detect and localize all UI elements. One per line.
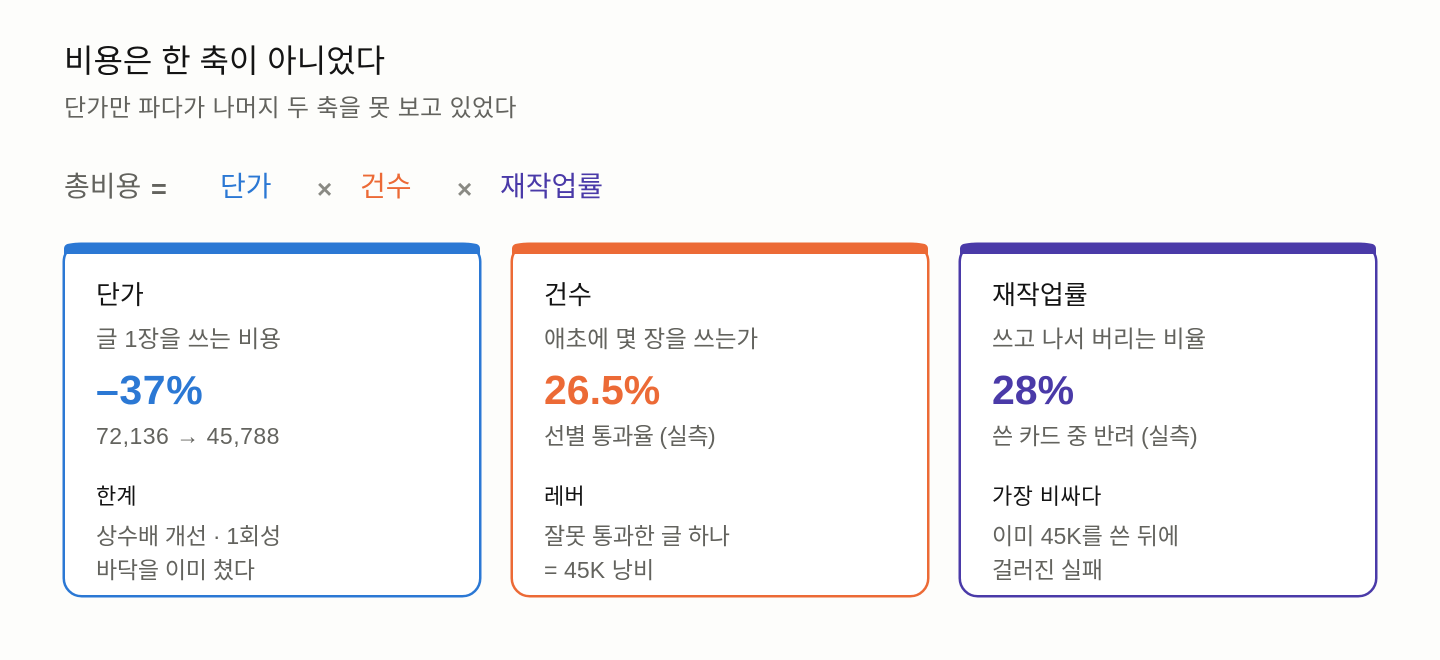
note text line 2: = 45K 낭비	[544, 557, 654, 583]
note text line 2: 바닥을 이미 쳤다	[96, 557, 255, 583]
card description: 글 1장을 쓰는 비용	[96, 326, 281, 352]
panel: count	[510, 242, 930, 598]
formula: times 2: ×	[457, 174, 472, 204]
note label: 레버	[544, 484, 585, 509]
formula: rework rate: 재작업률	[500, 171, 603, 202]
panel: rework rate	[958, 242, 1378, 598]
card heading: 재작업률	[992, 280, 1088, 310]
number detail: 72,136 → 45,788	[96, 423, 280, 449]
note text: 상수배 개선 · 1회성	[96, 523, 281, 549]
panel: unit price	[62, 242, 482, 598]
note label: 한계	[96, 484, 137, 509]
note label: 가장 비싸다	[992, 484, 1102, 509]
note text: 잘못 통과한 글 하나	[544, 523, 730, 549]
card description: 쓰고 나서 버리는 비율	[992, 326, 1206, 352]
formula: equals: =	[151, 174, 167, 204]
note text line 2: 걸러진 실패	[992, 557, 1103, 583]
title: 비용은 한 축이 아니었다	[64, 43, 385, 79]
subtitle: 단가만 파다가 나머지 두 축을 못 보고 있었다	[64, 95, 517, 122]
key number: –37%	[96, 367, 203, 413]
card description: 애초에 몇 장을 쓰는가	[544, 326, 758, 352]
key number: 26.5%	[544, 367, 660, 413]
number detail: 선별 통과율 (실측)	[544, 423, 715, 449]
card heading: 건수	[544, 280, 592, 310]
formula: times 1: ×	[317, 174, 332, 204]
formula	[64, 171, 603, 204]
formula: unit price: 단가	[220, 171, 272, 202]
card heading: 단가	[96, 280, 144, 310]
formula: count: 건수	[360, 171, 412, 202]
note text: 이미 45K를 쓴 뒤에	[992, 523, 1179, 549]
formula: total cost: 총비용	[64, 171, 141, 202]
number detail: 쓴 카드 중 반려 (실측)	[992, 423, 1197, 449]
key number: 28%	[992, 367, 1074, 413]
